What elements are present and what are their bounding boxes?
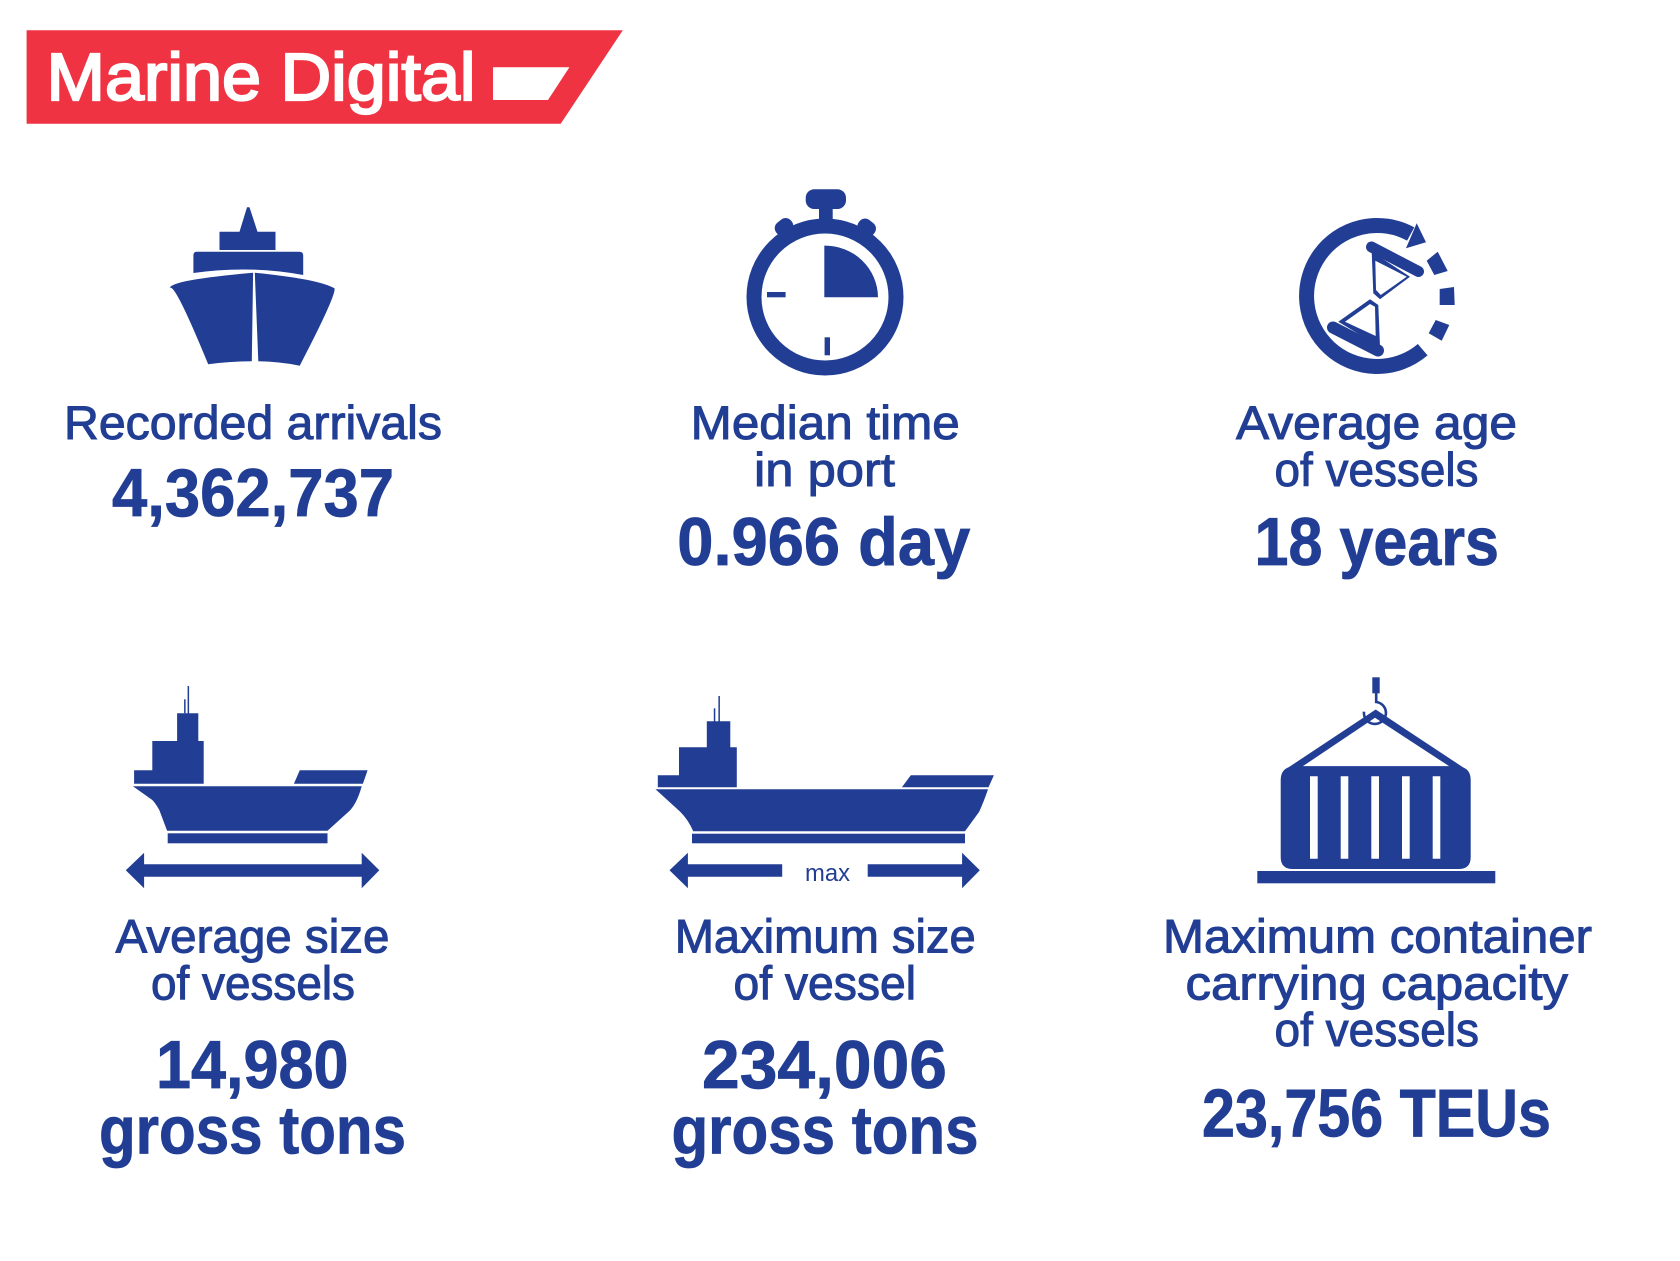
value: 14,980 [156, 1027, 348, 1103]
arrow: right [868, 853, 980, 888]
value: 0.966 day [677, 504, 970, 580]
panel: maximum size of vessel [656, 696, 994, 1168]
value: 18 years [1254, 504, 1499, 580]
panel: recorded arrivals [64, 207, 442, 531]
title: Marine Digital [46, 40, 476, 115]
label: Recorded arrivals [64, 396, 442, 449]
icon: ship side view [133, 686, 368, 843]
label: Median time [691, 396, 960, 449]
icon: ship front view [170, 207, 335, 366]
label: Average age [1236, 396, 1517, 449]
panel: average size of vessels: of vessels [151, 956, 355, 1009]
value: 23,756 TEUs [1202, 1076, 1551, 1152]
panel: maximum container capacity [1163, 677, 1592, 1152]
panel: median time in port: in port [754, 443, 895, 496]
panel: maximum size of vessel: of vessel [734, 956, 916, 1009]
panel: average size of vessels: gross tons [99, 1092, 406, 1168]
arrow: left [670, 853, 782, 888]
value: 234,006 [702, 1027, 947, 1103]
arrow: average length [126, 853, 379, 888]
panel: maximum container capacity: of vessels [1274, 1003, 1479, 1056]
panel: maximum size of vessel: gross tons [672, 1092, 978, 1168]
panel: average age of vessels: of vessels [1274, 443, 1478, 496]
header banner: Marine Digital logo [27, 30, 623, 124]
icon: stopwatch [754, 189, 896, 368]
panel: maximum container capacity: carrying capacity [1186, 956, 1569, 1009]
icon: container on crane hook [1257, 677, 1495, 883]
panel: median time in port [677, 189, 970, 580]
label: Maximum container [1163, 910, 1592, 963]
max label: max [805, 860, 850, 887]
value: 4,362,737 [112, 455, 394, 531]
icon: hourglass with circular arrow [1307, 223, 1455, 366]
panel: average size of vessels [99, 686, 406, 1168]
icon: large ship side view [656, 696, 994, 843]
label: Average size [116, 910, 390, 963]
label: Maximum size [675, 910, 976, 963]
panel: average age of vessels [1236, 223, 1517, 580]
logo mark [493, 67, 569, 100]
